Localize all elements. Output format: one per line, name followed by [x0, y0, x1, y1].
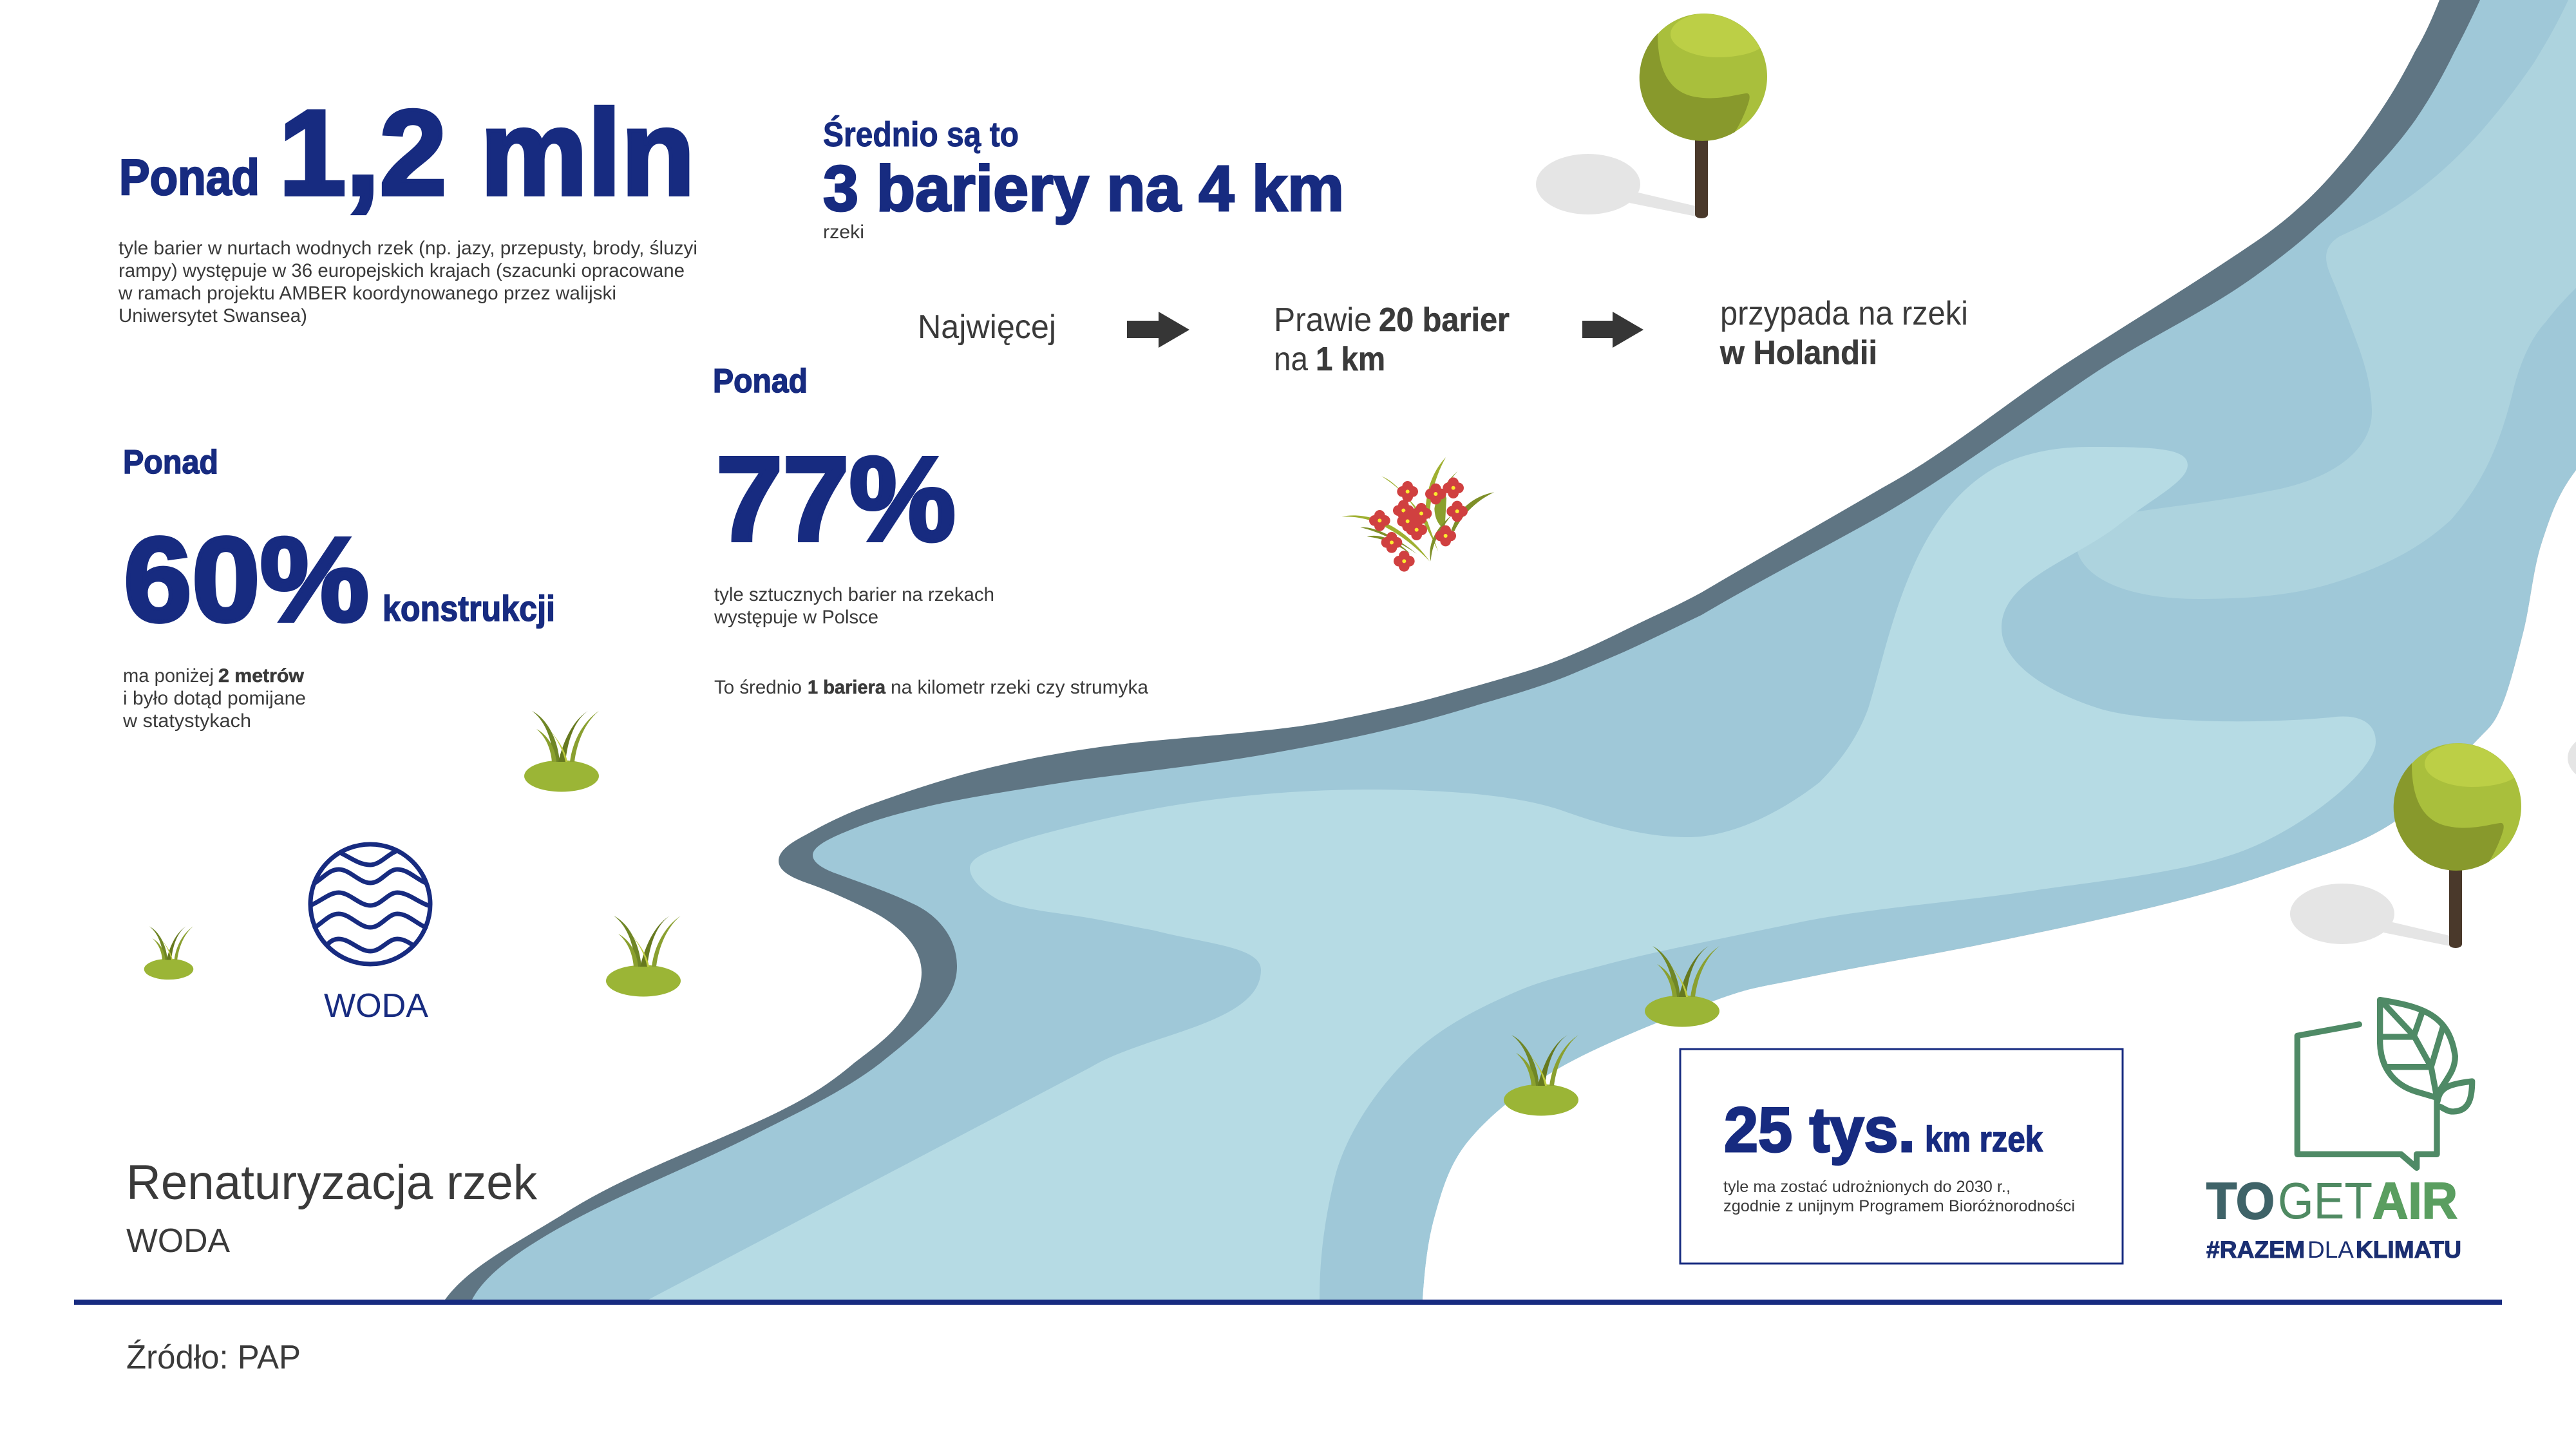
- icon: water globe: [310, 844, 430, 964]
- stat: ponad 60% konstrukcji: i było dotąd pomijane: [123, 688, 306, 709]
- logo: TOGETAIR: [2206, 1000, 2472, 1263]
- grass tuft: small left: [144, 926, 193, 980]
- stat: ponad 77%: tyle sztucznych barier na rzekach: [714, 584, 994, 605]
- river: mid-blue water: [472, 0, 2576, 1300]
- stat: 3 bariery na 4 km: 3 bariery na 4 km: [823, 153, 1344, 225]
- logo wordmark: [2206, 1172, 2458, 1229]
- stat: ponad 77%: Ponad: [713, 363, 808, 400]
- arrow: second: [1582, 312, 1643, 348]
- stat: ponad 1,2 mln: rampy) występuje w 36 europejskich krajach (szacunki opracowane: [118, 260, 685, 281]
- tree shadow cut by right edge: [2568, 728, 2576, 788]
- logo icon: speech bubble with leaf: [2297, 1000, 2472, 1168]
- logo hashtag: #RAZEM: [2206, 1236, 2305, 1263]
- text: prawie 20 barier na 1 km: 20 barier: [1379, 301, 1510, 339]
- stat: ponad 60% konstrukcji: konstrukcji: [383, 588, 555, 629]
- logo wordmark: AIR: [2372, 1172, 2458, 1229]
- stat: ponad 1,2 mln: 1,2 mln: [279, 85, 695, 220]
- panel: 25 tys. km rzek: 25 tys.: [1724, 1094, 1915, 1165]
- text: najwięcej: Najwięcej: [918, 308, 1056, 346]
- stat: ponad 1,2 mln: [118, 85, 697, 327]
- stat: 3 bariery na 4 km: Średnio są to: [823, 115, 1019, 154]
- logo wordmark: TO: [2206, 1172, 2275, 1229]
- text: prawie 20 barier na 1 km: 1 km: [1316, 341, 1385, 378]
- stat: ponad 77%: To średnio: [714, 677, 802, 698]
- text: przypada na rzeki w Holandii: w Holandii: [1719, 334, 1877, 372]
- stat: ponad 1,2 mln: w ramach projektu AMBER koordynowanego przez walijski: [118, 283, 616, 304]
- title: Renaturyzacja rzek: Renaturyzacja rzek: [126, 1155, 538, 1210]
- tree: right: [2290, 743, 2521, 948]
- stat: ponad 60% konstrukcji: w statystykach: [122, 710, 251, 732]
- logo wordmark: GET: [2278, 1172, 2372, 1229]
- logo hashtag: [2206, 1236, 2461, 1263]
- tree: top: [1536, 14, 1767, 218]
- grass tuft: above WODA icon right: [524, 711, 599, 792]
- grass tuft: river bank lower: [1504, 1035, 1578, 1115]
- river bank: dark band: [445, 0, 2576, 1300]
- river: medium-blue current: [2076, 0, 2576, 599]
- panel: 25 tys. km rzek: [1680, 1049, 2123, 1264]
- stat: ponad 77%: na kilometr rzeki czy strumyka: [891, 677, 1148, 698]
- stat: ponad 1,2 mln: Uniwersytet Swansea): [118, 305, 307, 327]
- source: Źródło: PAP: [126, 1339, 301, 1376]
- text: przypada na rzeki w Holandii: przypada na rzeki: [1720, 295, 1968, 332]
- river: light-blue current: [649, 447, 2376, 1300]
- text: prawie 20 barier na 1 km: na: [1274, 341, 1308, 378]
- arrow: first: [1127, 312, 1189, 348]
- stat: ponad 60% konstrukcji: Ponad: [123, 444, 218, 481]
- icon label: WODA: WODA: [324, 987, 428, 1025]
- stat: ponad 60% konstrukcji: ma poniżej: [123, 665, 214, 687]
- stat: ponad 77%: występuje w Polsce: [714, 607, 878, 628]
- footer rule: [74, 1300, 2502, 1305]
- grass tuft: river bank upper: [1645, 946, 1719, 1027]
- stat: ponad 77%: [713, 363, 1148, 698]
- stat: ponad 1,2 mln: tyle barier w nurtach wodnych rzek (np. jazy, przepusty, brody, śluzyi: [118, 238, 697, 259]
- text: prawie 20 barier na 1 km: Prawie: [1274, 301, 1372, 339]
- grass tuft: right of WODA icon: [606, 916, 681, 997]
- panel: 25 tys. km rzek: tyle ma zostać udrożnionych do 2030 r.,: [1723, 1178, 2011, 1196]
- panel: 25 tys. km rzek: km rzek: [1925, 1119, 2043, 1159]
- stat: ponad 60% konstrukcji: 2 metrów: [218, 665, 305, 687]
- stat: ponad 60% konstrukcji: [122, 444, 555, 732]
- text: prawie 20 barier na 1 km: [1274, 301, 1510, 378]
- panel: 25 tys. km rzek: zgodnie z unijnym Programem Bioróżnorodności: [1723, 1197, 2075, 1215]
- stat: ponad 77%: 77%: [716, 433, 956, 566]
- stat: ponad 1,2 mln: Ponad: [119, 149, 260, 205]
- logo hashtag: DLA: [2307, 1236, 2354, 1263]
- white land below river: [1423, 470, 2576, 1300]
- stat: ponad 60% konstrukcji: 60%: [124, 513, 369, 647]
- stat: 3 bariery na 4 km: [823, 115, 1344, 243]
- stat: ponad 77%: 1 bariera: [808, 677, 886, 698]
- logo hashtag: KLIMATU: [2356, 1236, 2461, 1263]
- title: Renaturyzacja rzek: WODA: [126, 1222, 230, 1260]
- stat: 3 bariery na 4 km: rzeki: [823, 222, 864, 243]
- river: [445, 0, 2576, 1300]
- title: Renaturyzacja rzek: [126, 1155, 538, 1260]
- icon: flower bush: [1341, 457, 1494, 572]
- text: przypada na rzeki w Holandii: [1719, 295, 1968, 372]
